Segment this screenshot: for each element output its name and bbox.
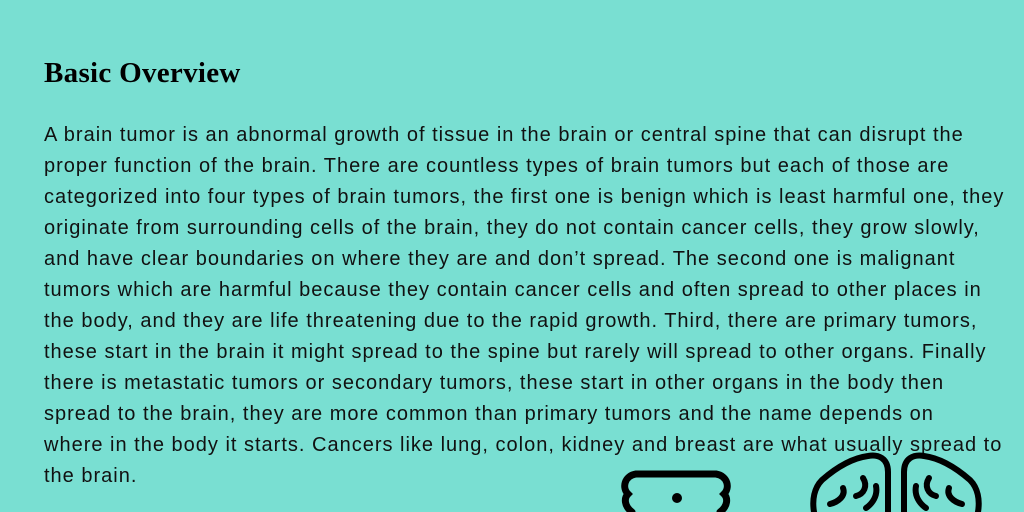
icon: spine vertebra (621, 470, 731, 512)
text block: overview paragraph: proper function of the brain. There are countless types of brain tumors but each of those are (44, 155, 949, 177)
text block: overview paragraph (44, 124, 1004, 487)
text block: overview paragraph: and have clear boundaries on where they are and don’t spread. The second one is malignant (44, 248, 955, 270)
title: Basic Overview (44, 57, 241, 89)
text block: overview paragraph: categorized into four types of brain tumors, the first one is benign which is least harmful one, they (44, 186, 1004, 208)
text block: overview paragraph: there is metastatic tumors or secondary tumors, these start in other organs in the body then (44, 372, 944, 394)
text block: overview paragraph: where in the body it starts. Cancers like lung, colon, kidney and breast are what usually spread to (44, 434, 1002, 456)
text block: overview paragraph: these start in the brain it might spread to the spine but rarely will spread to other organs. Finally (44, 341, 987, 363)
text block: overview paragraph: tumors which are harmful because they contain cancer cells and often spread to other places in (44, 279, 982, 301)
text block: overview paragraph: A brain tumor is an abnormal growth of tissue in the brain or central spine that can disrupt the (44, 124, 964, 146)
text block: overview paragraph: spread to the brain, they are more common than primary tumors and the name depends on (44, 403, 934, 425)
icon: brain (810, 452, 982, 512)
text block: overview paragraph: originate from surrounding cells of the brain, they do not contain cancer cells, they grow slowly, (44, 217, 980, 239)
text block: overview paragraph: the brain. (44, 465, 137, 487)
text block: overview paragraph: the body, and they are life threatening due to the rapid growth. Third, there are primary tumors, (44, 310, 977, 332)
